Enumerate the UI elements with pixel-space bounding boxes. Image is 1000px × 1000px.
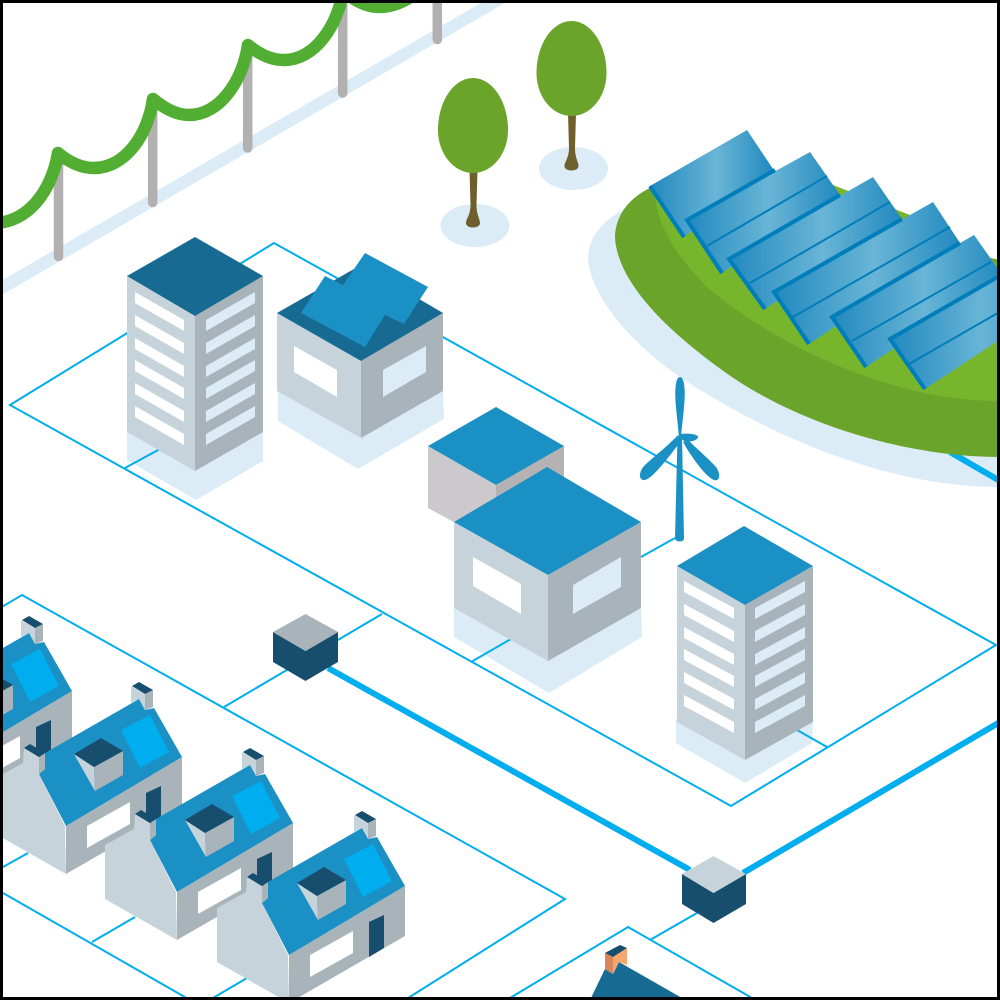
junction box 2: [682, 856, 746, 923]
tree 2: [536, 21, 608, 190]
thick power lines: [328, 452, 1000, 873]
solar panel 5: [832, 235, 1000, 367]
green cable: [0, 0, 420, 223]
tree 1: [438, 78, 510, 247]
hill with solar panels: [615, 130, 1000, 457]
solar panel 1: [650, 130, 773, 237]
building C grey: [428, 407, 564, 545]
building D: [454, 467, 641, 661]
house 2: [0, 682, 182, 874]
junction box 1: [273, 614, 338, 681]
power line posts: [58, 0, 437, 256]
building B with rooftop panels: [277, 253, 443, 438]
tall building E: [677, 526, 813, 760]
house 3: [105, 748, 293, 940]
bottom house with orange chimney: [590, 945, 686, 1000]
house 4: [217, 811, 405, 1000]
wind turbine: [640, 377, 719, 542]
solar panel 4: [774, 202, 960, 344]
grid lines: plots and connections: [0, 243, 996, 1000]
solar panel 2: [687, 152, 840, 273]
ground shadows: [127, 210, 1000, 783]
tall building A: [127, 237, 263, 471]
solar panel 3: [729, 177, 902, 309]
solar panel 6: [890, 257, 1000, 389]
house 1: [0, 616, 72, 808]
road shadow band: [0, 0, 510, 296]
